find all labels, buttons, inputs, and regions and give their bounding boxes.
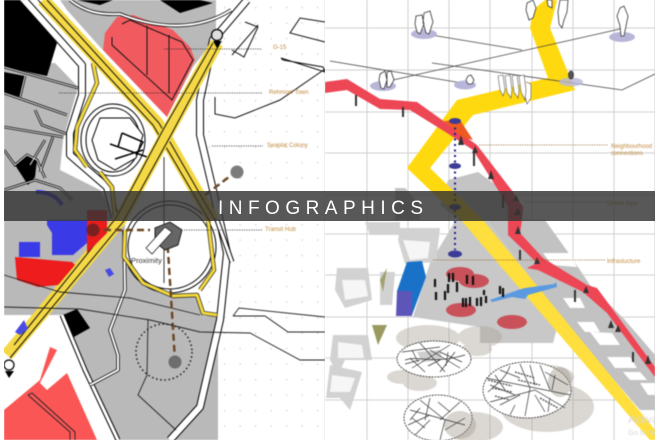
blue arrow: [490, 282, 557, 302]
grid: [325, 0, 655, 440]
blue and red buildings: [15, 192, 114, 335]
taupe ellipses: [387, 325, 594, 440]
trees on band: [355, 95, 651, 364]
map labels: Rehmian Town: [269, 90, 309, 96]
pedestrian group: [498, 75, 531, 104]
gray plaza: [413, 220, 560, 343]
silhouette crowd: [435, 273, 503, 307]
pink land bottom left: [4, 347, 97, 440]
upper right parcels: [215, 18, 325, 118]
block internal lines: [112, 20, 193, 100]
greenery: [380, 268, 387, 292]
layer labels: Neighbourhood: [611, 144, 652, 150]
highway end markers: [212, 30, 222, 40]
red plaza ellipses: [446, 267, 527, 329]
proximity label: Proximity: [131, 256, 162, 265]
route proximity dashed: [98, 174, 232, 352]
blue kiosk: [396, 261, 426, 316]
neighbourhood map circle two: [483, 362, 572, 418]
gray land areas: [4, 0, 218, 440]
yellow route lower tint: [461, 220, 655, 440]
purple node ellipses: [448, 118, 462, 258]
roundabout lower: [124, 201, 216, 293]
panel: axonometric layers: [325, 0, 659, 440]
network lines: [330, 29, 655, 90]
white road network: [24, 0, 247, 440]
blue dotted vertical connector: [454, 122, 456, 250]
roundabout upper: [81, 104, 150, 176]
map labels: [265, 45, 309, 233]
walkable radius dotted circle: [136, 324, 192, 380]
leader lines: [59, 49, 263, 230]
black buildings: [4, 0, 213, 338]
map labels: G-15: [273, 45, 287, 51]
human figures: [379, 0, 628, 89]
red green layer band: [325, 79, 655, 377]
gray building blocks behind banner: [395, 172, 520, 220]
title banner: [4, 191, 655, 221]
transit hub shape: [146, 222, 182, 254]
building rows right: [487, 220, 655, 410]
yellow route: [407, 0, 655, 440]
watermark text: [628, 414, 659, 437]
yellow ramps: [75, 63, 217, 315]
building cluster left: [326, 222, 440, 410]
neighbourhood map circle one: [397, 341, 471, 377]
watermark text: Go to Se: [628, 428, 658, 437]
parcel lines: [4, 67, 78, 200]
watermark text: Activa: [628, 414, 659, 426]
map labels: Transit Hub: [265, 227, 296, 233]
node circles: [230, 166, 244, 178]
people platforms: [370, 29, 635, 91]
layer labels: Green layer: [607, 201, 638, 207]
leader lines: [433, 145, 608, 260]
neighbourhood map circle three: [404, 395, 476, 440]
title: INFOGRAPHICS: [218, 198, 423, 219]
layer labels: [607, 144, 652, 265]
thin road lines: [4, 157, 325, 430]
layer labels: connections: [611, 151, 643, 157]
layer labels: Infrastucture: [607, 259, 641, 265]
map labels: Seaplat Colony: [267, 143, 308, 149]
panel: site plan map: [4, 0, 325, 440]
yellow highways: [7, 0, 220, 358]
pink development block: [103, 15, 195, 117]
dark overlap of routes: [444, 120, 473, 140]
